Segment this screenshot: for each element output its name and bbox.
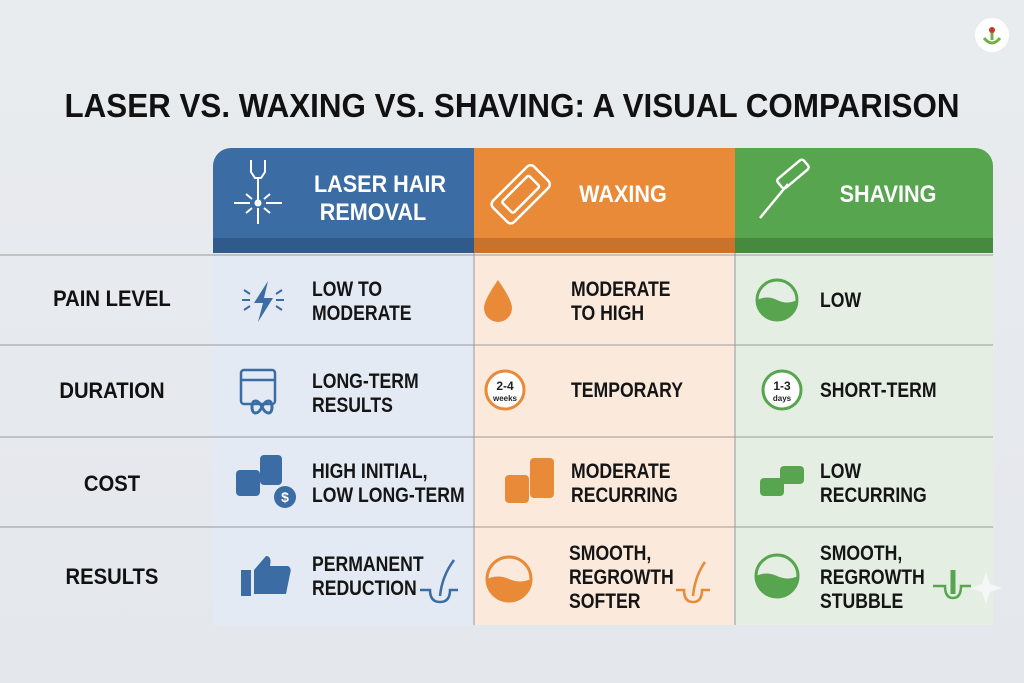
cell text: [312, 278, 937, 613]
icon: calendar: [241, 370, 275, 413]
icon: stubble follicle: [933, 570, 971, 598]
icon: 2-4 weeks clock: [486, 371, 524, 409]
cell text: TO HIGH: [571, 302, 644, 325]
cell text: STUBBLE: [820, 590, 903, 613]
cell text: MODERATE: [312, 302, 412, 325]
row labels: DURATION: [59, 379, 165, 403]
grid lines: [0, 253, 993, 625]
icon: 1-3 days clock: days: [773, 394, 792, 403]
row labels: RESULTS: [66, 565, 158, 589]
cell text: HIGH INITIAL,: [312, 460, 428, 483]
icon: 1-3 days clock: 1-3: [773, 379, 791, 393]
icon: skin circle: [757, 280, 797, 320]
icon: 1-3 days clock: [763, 371, 801, 409]
icon: thumbs up: [241, 556, 291, 596]
header titles: WAXING: [579, 180, 667, 207]
cell text: LONG-TERM: [312, 370, 419, 393]
header titles: SHAVING: [840, 180, 936, 207]
header titles: [314, 170, 936, 225]
icon: lightning: [242, 281, 284, 322]
cell text: SHORT-TERM: [820, 379, 937, 402]
icon: coins shaving: [760, 466, 804, 496]
cell text: RECURRING: [571, 484, 678, 507]
cell text: LOW: [820, 289, 862, 312]
icon: skin circle shaving: [756, 555, 798, 597]
row labels: [53, 287, 171, 589]
icon: coins laser: $: [281, 489, 289, 505]
icon: drop: [484, 280, 512, 322]
row labels: COST: [84, 472, 140, 496]
cell text: MODERATE: [571, 278, 671, 301]
header titles: REMOVAL: [320, 198, 426, 225]
cell text: SMOOTH,: [820, 542, 902, 565]
row labels: PAIN LEVEL: [53, 287, 171, 311]
icon: 2-4 weeks clock: 2-4: [496, 379, 514, 393]
cell text: PERMANENT: [312, 553, 424, 576]
cell text: RESULTS: [312, 394, 393, 417]
cell text: LOW TO: [312, 278, 382, 301]
header titles: LASER HAIR: [314, 170, 446, 197]
cell text: SOFTER: [569, 590, 641, 613]
cell text: RECURRING: [820, 484, 927, 507]
header: shaving: [735, 148, 993, 253]
sparkle: [970, 572, 1002, 604]
cell text: MODERATE: [571, 460, 671, 483]
title: LASER VS. WAXING VS. SHAVING: A VISUAL COMPARISON: [64, 87, 960, 124]
cell text: SMOOTH,: [569, 542, 651, 565]
icon: hair follicle laser: [420, 560, 458, 602]
icon: follicle waxing: [676, 562, 710, 602]
cell text: LOW: [820, 460, 862, 483]
icon: coins waxing: [505, 458, 554, 503]
header: waxing: [474, 148, 735, 253]
icon: skin circle waxing: [487, 557, 531, 601]
logo badge: [975, 18, 1009, 52]
icon: 2-4 weeks clock: weeks: [492, 394, 518, 403]
cell text: LOW LONG-TERM: [312, 484, 465, 507]
cell text: REDUCTION: [312, 577, 417, 600]
cell text: TEMPORARY: [571, 379, 683, 402]
cell text: REGROWTH: [820, 566, 925, 589]
icon: coins laser: [236, 455, 296, 508]
cell text: REGROWTH: [569, 566, 674, 589]
column backgrounds: [213, 253, 993, 625]
header: laser: [213, 148, 474, 253]
